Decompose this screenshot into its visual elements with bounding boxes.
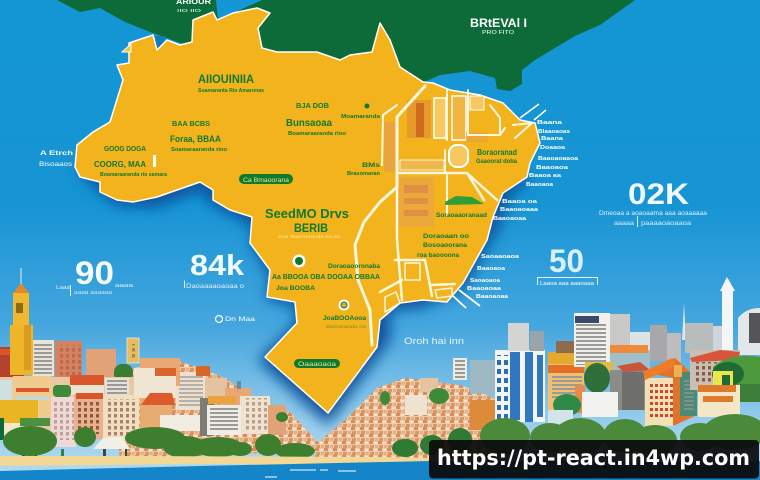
east coast annotation lines: Baaoaoa xyxy=(477,266,506,272)
stat: 84k xyxy=(184,250,245,290)
map shadow xyxy=(75,167,532,425)
small label on green land, top xyxy=(176,0,514,36)
map labels: Brasomaran xyxy=(347,171,380,177)
east coast annotation lines: Baaoaoaa xyxy=(493,216,527,222)
east coast annotation lines: Baaoaoaaoa xyxy=(538,156,579,162)
map labels: COORG, MAA xyxy=(94,160,146,169)
map labels: Soa Soamaranda rio da xyxy=(278,234,341,239)
map labels: Oaaaoaoa xyxy=(298,362,337,368)
stat: 84k: 84k xyxy=(190,250,245,282)
umbrella kiosk xyxy=(61,437,130,461)
stat: 90: Laaa xyxy=(56,285,70,291)
east coast annotation lines: Baana xyxy=(537,120,563,126)
white and blue tower xyxy=(495,323,545,422)
east coast annotation lines: Baaoaoaa xyxy=(476,294,509,300)
stat: 02K: aaaaa xyxy=(614,221,635,227)
stat: 02K: paaaaoaoaaoa xyxy=(641,221,692,227)
left coast label: Bisoaaos xyxy=(39,162,72,168)
east coast annotation lines xyxy=(453,104,579,308)
trees xyxy=(3,412,315,464)
map labels: AIIOUINIIA xyxy=(198,72,254,86)
tower xyxy=(10,268,33,375)
icons on map xyxy=(153,104,484,310)
city map blocks xyxy=(384,96,488,227)
east coast annotation lines: Baaoaoa xyxy=(536,165,569,171)
map labels: Gaaoorat doba xyxy=(476,159,518,165)
east coast annotation lines: Baaoaoaa xyxy=(467,286,502,292)
stat: 50: Laaoa aaa aaaoaaa xyxy=(540,281,595,287)
map labels: roa baoooona xyxy=(417,252,459,259)
map labels: Boamaraaranda rio samara xyxy=(100,172,167,178)
map labels: BMs xyxy=(362,162,380,169)
left coast label: A Etrch xyxy=(40,150,73,157)
east coast annotation lines: Blaaoaoas xyxy=(538,129,570,135)
favela hillside xyxy=(315,378,500,462)
hillside favela xyxy=(110,358,325,460)
stat: 50: 50 xyxy=(549,243,584,279)
map labels: GOOG DOGA xyxy=(104,146,146,153)
map labels: Boraoranad xyxy=(477,148,517,157)
stat: 90: 90 xyxy=(75,255,114,291)
map labels: Soamaranta Rio Amaronas xyxy=(198,88,264,94)
stat: 50 xyxy=(538,243,598,287)
small labels on the sea: Oroh hai inn xyxy=(404,336,464,346)
stat: 02K xyxy=(599,178,707,227)
orange corner block xyxy=(643,358,697,426)
panel: left city skyline xyxy=(0,268,325,464)
stat: 90: aaaa aaaaaa xyxy=(74,290,112,296)
map labels: Doraoaooronaba xyxy=(328,263,380,270)
small labels on the sea xyxy=(216,316,464,346)
map labels: Ca Bmaoorana xyxy=(243,177,289,184)
left coast label xyxy=(39,150,73,168)
url banner xyxy=(429,440,759,478)
small label on green land, top: PRO FITO xyxy=(482,30,514,36)
map labels: Doraoaan oo xyxy=(423,233,469,240)
map labels: Bosoaoorana xyxy=(423,242,467,249)
east coast annotation lines: Baana xyxy=(541,136,564,142)
small labels on the sea: Dn Maa xyxy=(225,317,256,323)
stat: 02K: Dmeoaa a aoaoaama aaa aoaaaaaa xyxy=(599,210,707,217)
beach and water xyxy=(0,456,760,480)
map labels: BAA BCBS xyxy=(172,121,210,128)
panel: right city skyline xyxy=(315,277,760,462)
far right towers xyxy=(612,277,760,363)
panel: yellow Brazil map xyxy=(75,8,540,413)
map labels: Soraoaaoranaad xyxy=(436,212,487,219)
east coast annotation lines: Saoaaoaoa xyxy=(481,254,520,260)
map labels: Moamaranda xyxy=(341,114,380,120)
small label on green land, top: IIO IIO xyxy=(177,8,202,13)
east coast annotation lines: Baaoaoaaa xyxy=(500,207,539,213)
map labels: BJA DOB xyxy=(296,103,329,110)
url banner: https://pt-react.in4wp.com xyxy=(437,446,750,470)
east coast annotation lines: Baaoa oa xyxy=(502,199,538,205)
map labels: Bunsaoaa xyxy=(286,118,332,129)
stat: 90: aaaa xyxy=(115,283,133,289)
map labels: SeedMO Drvs xyxy=(265,206,349,221)
map labels: Aa BBOOA OBA DOOAA OBBAA xyxy=(272,274,380,281)
east coast annotation lines: Doaaoa xyxy=(540,145,566,151)
map labels: JoaBOOAooa xyxy=(323,315,366,322)
map labels: Soamaraaranda rioo xyxy=(171,147,228,153)
stat: 90 xyxy=(56,255,133,296)
map labels: Boamaraaranda rioo xyxy=(288,131,347,137)
map labels: Bamaranda rio xyxy=(326,324,367,329)
road network xyxy=(355,86,532,345)
title: country label: BRtEVAl I xyxy=(470,16,527,30)
panel: green landmass xyxy=(57,0,635,91)
east coast annotation lines: Baaoaoa xyxy=(526,182,554,188)
map labels xyxy=(94,72,518,368)
map labels: BERIB xyxy=(294,221,328,235)
east coast annotation lines: Saoaoaoa xyxy=(470,278,501,284)
map labels: Foraa, BBAA xyxy=(170,134,221,144)
map labels: Joa BOOBA xyxy=(276,285,315,292)
stat: 02K: 02K xyxy=(628,178,689,211)
foreground trees xyxy=(392,414,760,457)
stat: 84k: Daoaaaaoaoaa o xyxy=(186,284,245,290)
east coast annotation lines: Baaoa aa xyxy=(529,173,562,179)
